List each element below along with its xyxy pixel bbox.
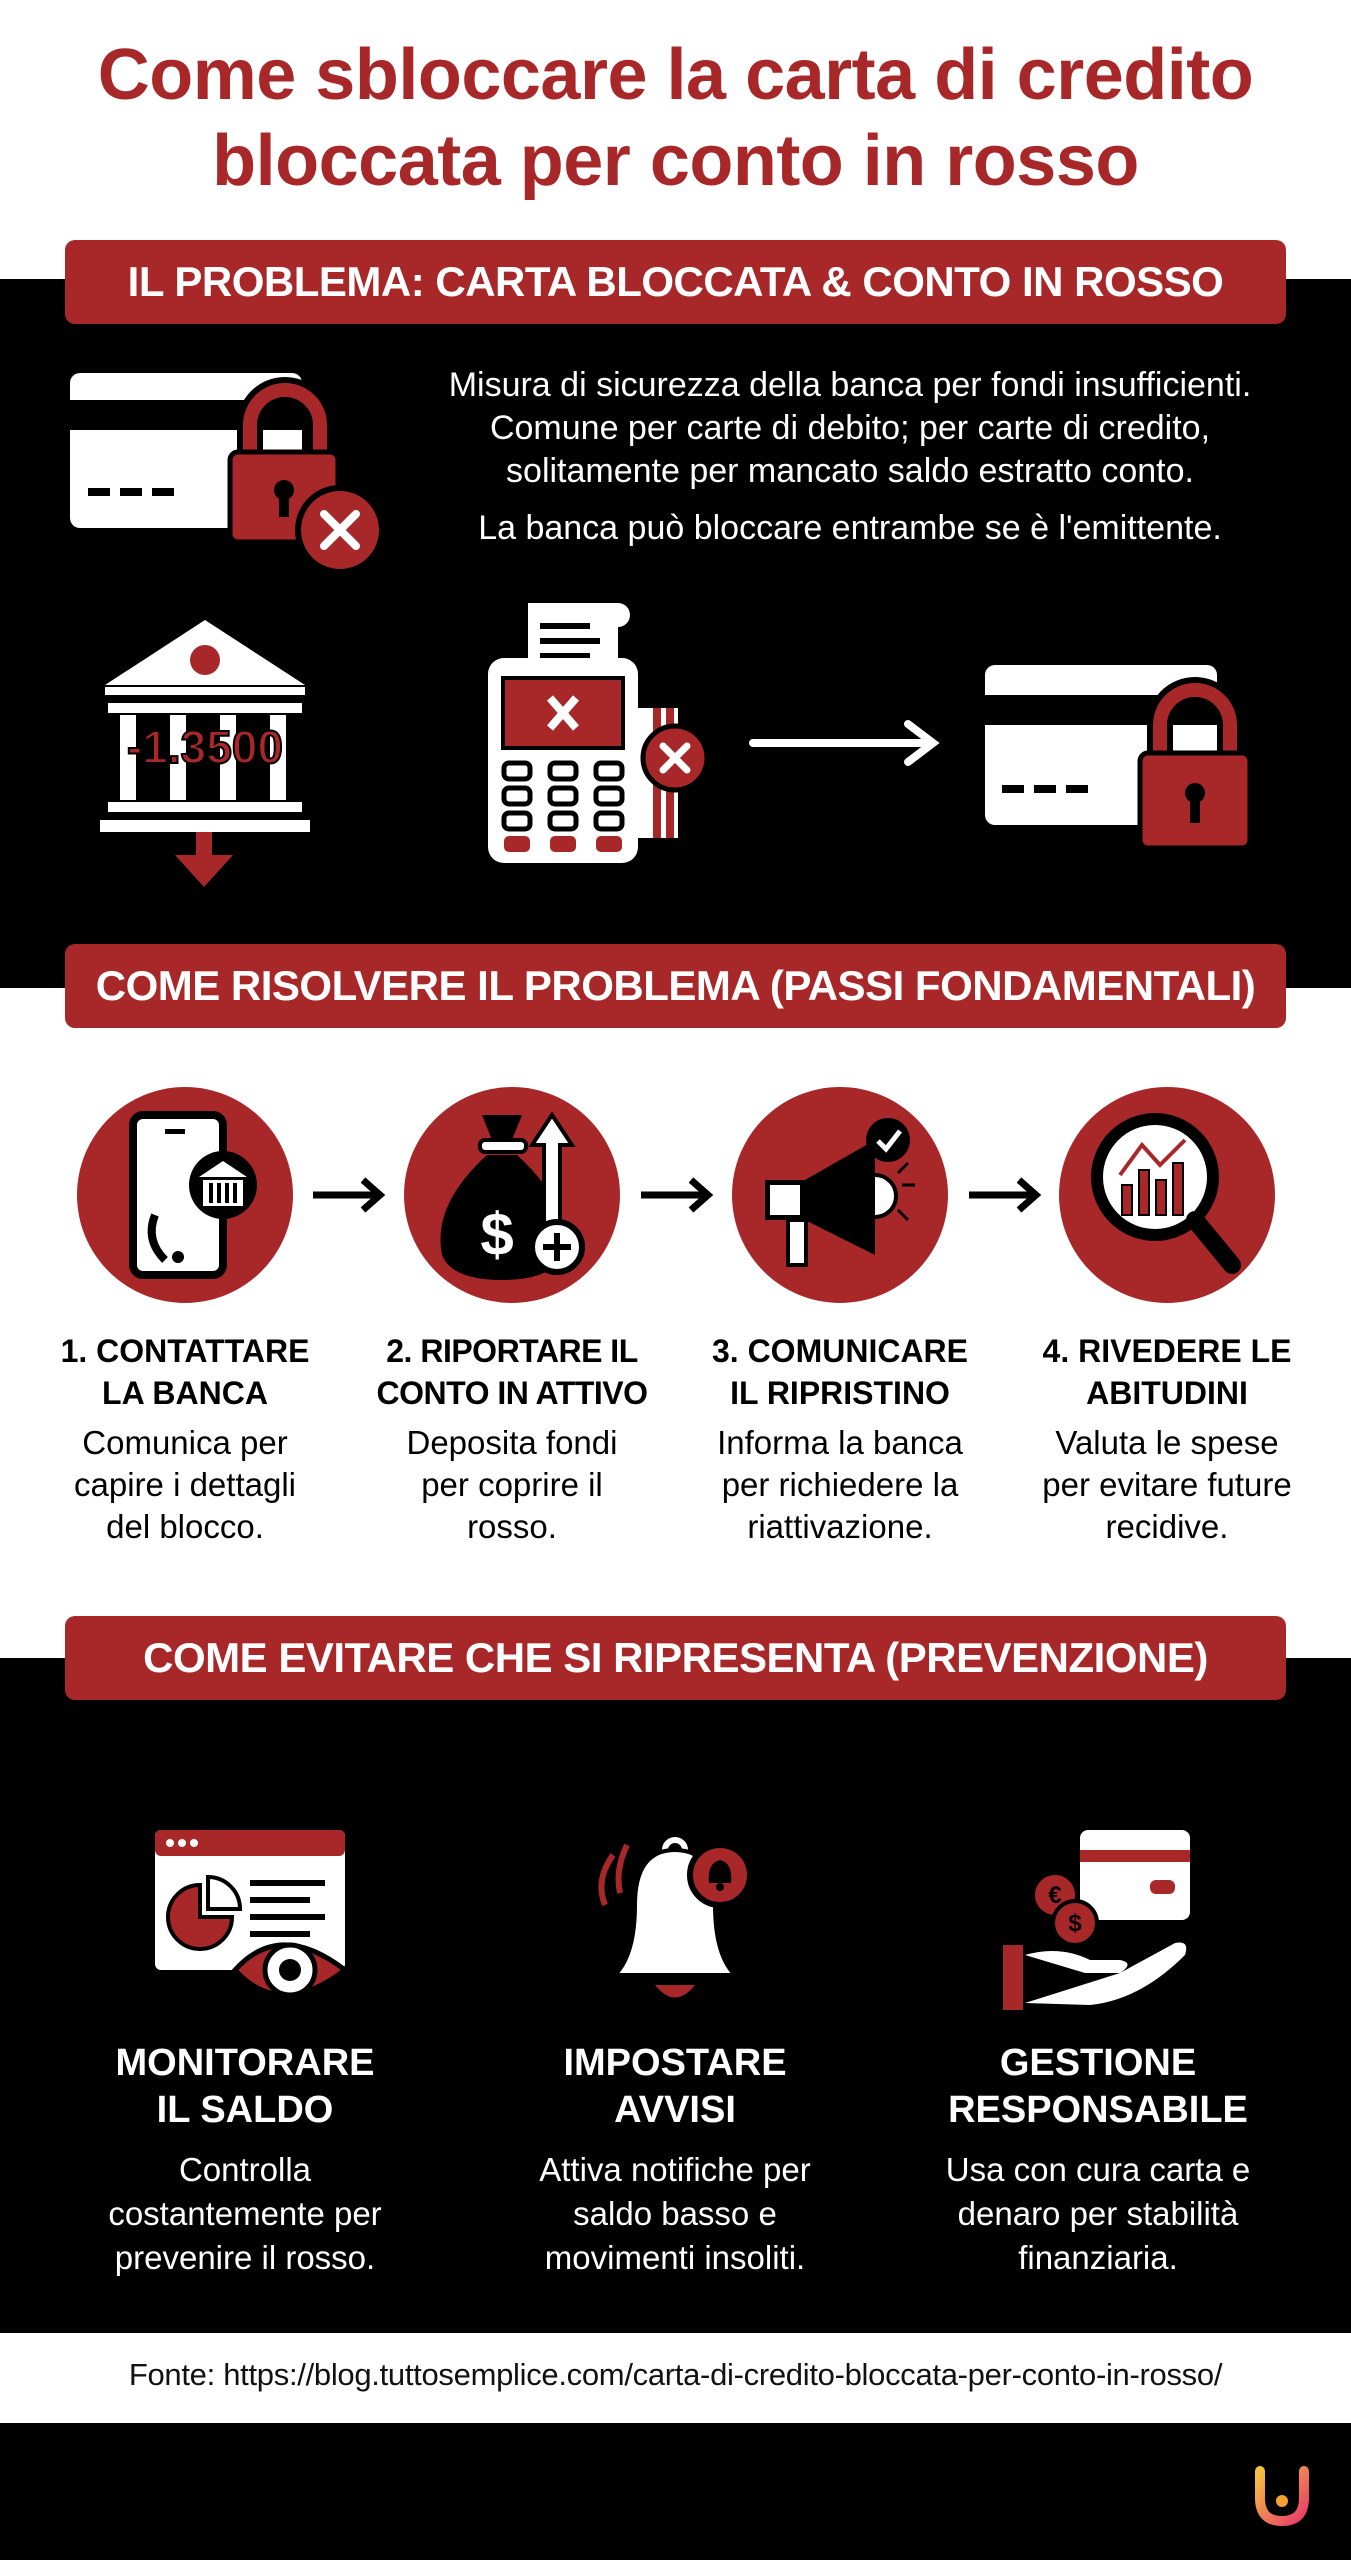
panel: bottom bar (0, 2423, 1351, 2560)
step 3 text: per richiedere la (722, 1466, 958, 1503)
icon: step 1 phone bank (77, 1087, 293, 1303)
step 2 text (376, 1333, 648, 1545)
step 2 text: 2. RIPORTARE IL (386, 1333, 638, 1369)
step 4 text: Valuta le spese (1055, 1424, 1279, 1461)
icon: bell alert (598, 1837, 747, 1998)
icon: hand with money: € (1048, 1882, 1062, 1909)
step 1 text: 1. CONTATTARE (61, 1333, 309, 1369)
step 3 text: 3. COMUNICARE (712, 1333, 968, 1369)
panel: prevention (0, 1658, 1351, 2333)
heading: problem: IL PROBLEMA: CARTA BLOCCATA & CONTO IN ROSSO (128, 258, 1223, 305)
step 1 text: del blocco. (106, 1508, 264, 1545)
text block: problem description: solitamente per mancato saldo estratto conto. (506, 452, 1194, 490)
prevention item 1 text: IL SALDO (157, 2089, 333, 2131)
prevention item 3 text: finanziaria. (1018, 2239, 1178, 2276)
step 4 text: per evitare future (1042, 1466, 1292, 1503)
prevention item 1 text (108, 2042, 382, 2276)
icon: monitor balance (155, 1830, 345, 1992)
title: bloccata per conto in rosso (212, 121, 1139, 201)
icon: POS terminal declined (488, 603, 704, 863)
arrow 2 (641, 1177, 714, 1213)
heading: prevention (65, 1616, 1286, 1700)
step 1 text: LA BANCA (102, 1375, 268, 1411)
step 1 text: capire i dettagli (74, 1466, 296, 1503)
text block: problem description: Comune per carte di debito; per carte di credito, (490, 409, 1210, 447)
arrow 3 (969, 1177, 1042, 1213)
prevention item 1 text: costantemente per (108, 2195, 382, 2232)
prevention item 1 text: prevenire il rosso. (115, 2239, 375, 2276)
prevention item 3 text (946, 2042, 1250, 2276)
icon: logo (1255, 2466, 1309, 2526)
step 4 text (1042, 1333, 1292, 1545)
step 1 text (61, 1333, 309, 1545)
heading: prevention: COME EVITARE CHE SI RIPRESENTA (PREVENZIONE) (143, 1634, 1208, 1681)
source footer: Fonte: https://blog.tuttosemplice.com/carta-di-credito-bloccata-per-conto-in-rosso/ (129, 2357, 1222, 2392)
text block: problem description: La banca può bloccare entrambe se è l'emittente. (478, 509, 1222, 547)
icon: blocked card (70, 373, 379, 569)
step 3 text: riattivazione. (747, 1508, 933, 1545)
prevention item 2 text: AVVISI (614, 2089, 736, 2131)
prevention item 3 text: denaro per stabilità (958, 2195, 1238, 2232)
text block: problem description (449, 366, 1251, 547)
icon: step 4 magnifier chart (1059, 1087, 1275, 1303)
prevention item 3 text: Usa con cura carta e (946, 2151, 1250, 2188)
heading: problem (65, 240, 1286, 324)
step 2 text: per coprire il (421, 1466, 603, 1503)
prevention item 1 text: MONITORARE (116, 2042, 374, 2084)
panel: problem (0, 279, 1351, 988)
icon: hand with money (1003, 1830, 1190, 2010)
step 3 text (712, 1333, 968, 1545)
arrow 1 (313, 1177, 386, 1213)
step 1 text: Comunica per (82, 1424, 288, 1461)
icon: bank with negative balance: -1.3500 (127, 721, 283, 773)
step 2 text: CONTO IN ATTIVO (376, 1375, 648, 1411)
step 3 text: IL RIPRISTINO (730, 1375, 950, 1411)
heading: solve: COME RISOLVERE IL PROBLEMA (PASSI FONDAMENTALI) (96, 962, 1255, 1009)
step 4 text: 4. RIVEDERE LE (1043, 1333, 1291, 1369)
prevention item 2 text: saldo basso e (573, 2195, 777, 2232)
icon: step 3 megaphone (732, 1087, 948, 1303)
step 4 text: ABITUDINI (1086, 1375, 1248, 1411)
text block: problem description: Misura di sicurezza della banca per fondi insufficienti. (449, 366, 1251, 404)
step 4 text: recidive. (1106, 1508, 1228, 1545)
heading: solve (65, 944, 1286, 1028)
prevention item 2 text: IMPOSTARE (563, 2042, 787, 2084)
icon: hand with money: $ (1068, 1910, 1082, 1937)
icon: bank with negative balance (100, 620, 310, 887)
icon: locked card (985, 665, 1248, 846)
prevention item 3 text: GESTIONE (1000, 2042, 1196, 2084)
prevention item 3 text: RESPONSABILE (948, 2089, 1248, 2131)
prevention item 2 text: Attiva notifiche per (539, 2151, 811, 2188)
title: Come sbloccare la carta di credito (98, 35, 1253, 115)
step 3 text: Informa la banca (717, 1424, 963, 1461)
prevention item 1 text: Controlla (179, 2151, 311, 2188)
arrow: leads to blocked card (749, 720, 940, 766)
prevention item 2 text: movimenti insoliti. (545, 2239, 805, 2276)
icon: step 2 money bag: $ (480, 1201, 514, 1268)
title (98, 35, 1253, 201)
step 2 text: rosso. (467, 1508, 557, 1545)
icon: step 2 money bag (404, 1087, 620, 1303)
step 2 text: Deposita fondi (406, 1424, 617, 1461)
prevention item 2 text (539, 2042, 811, 2276)
